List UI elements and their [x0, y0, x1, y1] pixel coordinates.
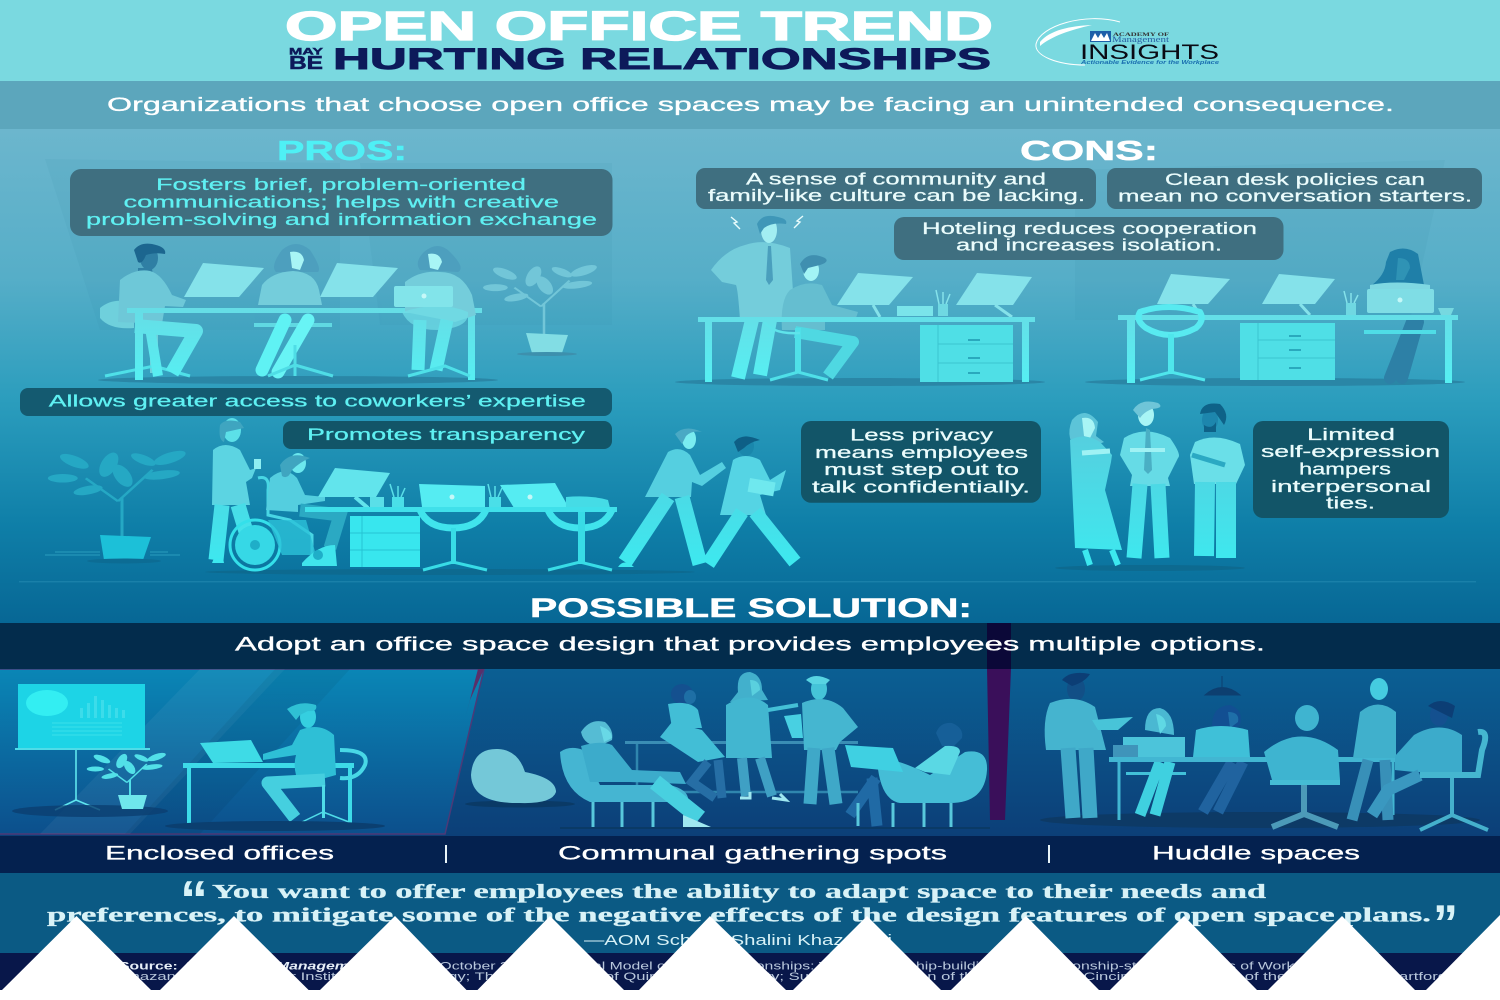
seated man: [762, 255, 858, 380]
beanbag: [465, 749, 575, 808]
callout: cons community: A sense of community and: [746, 170, 1046, 188]
huddle space: [1040, 673, 1488, 830]
scene: pros team at shared desk: [98, 244, 599, 384]
panel: solution illustrations: [0, 668, 1500, 836]
woman sitting on table: [660, 684, 725, 798]
wheelchair user: [230, 453, 340, 570]
logo: Academy of Management Insights: Management: [1112, 35, 1170, 44]
callout: cons limited self-expression: self-expression: [1261, 443, 1440, 461]
callout: cons less privacy: Less privacy: [850, 427, 994, 445]
logo: Academy of Management Insights: [1036, 19, 1219, 66]
logo: Academy of Management Insights: Actionable Evidence for the Workplace: [1080, 60, 1219, 66]
band: solution option labels: [0, 836, 1500, 873]
source footer: [0, 953, 1500, 990]
man on chair, back view: [1264, 705, 1340, 827]
callout: cons hoteling: [894, 217, 1284, 260]
callout: cons community: family-like culture can be lacking.: [708, 187, 1085, 205]
callout: cons less privacy: must step out to: [824, 461, 1019, 479]
heading: pros: PROS:: [277, 135, 407, 166]
band: solution option labels: Enclosed offices: [105, 844, 334, 864]
callout: cons limited self-expression: [1253, 421, 1449, 518]
standing man: [711, 216, 803, 378]
desk with monitor and laptops: [305, 468, 617, 570]
white torn zigzag edge: [0, 915, 1500, 1000]
title: MAY: [289, 46, 323, 56]
title: [285, 3, 993, 76]
heading: cons: CONS:: [1020, 135, 1158, 166]
table: [1109, 757, 1410, 820]
quote block: “: [180, 871, 208, 929]
seated man right: [1372, 701, 1488, 830]
callout: cons limited self-expression: Limited: [1307, 426, 1395, 444]
callout: cons clean desk: mean no conversation starters.: [1118, 188, 1472, 206]
purple column: [987, 668, 1011, 820]
callout: cons hoteling: Hoteling reduces cooperation: [922, 220, 1257, 238]
desk and chair: [1118, 307, 1458, 383]
quote block: —AOM Scholar Shalini Khazanchi: [584, 933, 892, 949]
quote block: You want to offer employees the ability to adapt space to their needs and: [212, 881, 1266, 903]
small plant: [87, 751, 167, 809]
callout: pros fosters brief communications: Fosters brief, problem-oriented: [156, 176, 526, 194]
scene: pros plant, wheelchair user, colleagues: [45, 418, 795, 575]
source footer: Shalini Khazanchi of Rochester Institute of Technology; Theresa Sprinkle of Quinnipiac University; Suzanne Masterson of the University of Cincinnati; Ning Tong of the University of Hartford: [65, 971, 1447, 983]
title: HURTING RELATIONSHIPS: [333, 43, 991, 76]
callout: cons clean desk: Clean desk policies can: [1165, 171, 1425, 189]
man at laptop: [165, 703, 385, 831]
callout: pros transparency: Promotes transparency: [307, 426, 586, 444]
seated woman in armchair: [560, 721, 711, 827]
callout: cons less privacy: [801, 421, 1041, 503]
band: solution option labels: Communal gathering spots: [558, 844, 947, 864]
enclosed office: [0, 669, 484, 834]
desk: [127, 308, 482, 380]
standing man with tablet: [1045, 673, 1133, 818]
standing woman talking: [726, 672, 798, 800]
callout: pros access to expertise: Allows greater access to coworkers’ expertise: [49, 393, 586, 411]
callout: pros fosters brief communications: communications; helps with creative: [124, 194, 559, 212]
large plant: [45, 448, 188, 564]
band: solution option labels: Huddle spaces: [1152, 844, 1360, 864]
logo: Academy of Management Insights: ACADEMY OF: [1113, 33, 1169, 38]
woman at laptop: [1364, 248, 1454, 378]
standing woman with cup: [1352, 678, 1396, 820]
callout: cons clean desk: [1107, 168, 1482, 209]
band: solution statement: [0, 623, 1500, 669]
source footer: Source: Academy of Management Review, October 2018. A Spatial Model of Work Relationships: The Relationship-building and Relationship-straining Effects of Workspace Design: [119, 960, 1390, 972]
scene: cons manager standing over worker: [675, 216, 1045, 386]
woman in armchair with laptop: [560, 723, 990, 829]
logo: Academy of Management Insights: INSIGHTS: [1080, 41, 1219, 64]
walking colleagues: [618, 428, 795, 567]
band: solution statement: Adopt an office space design that provides employees multiple options.: [235, 635, 1265, 656]
heading: possible solution: POSSIBLE SOLUTION:: [530, 593, 972, 623]
seated women: [1113, 705, 1250, 815]
quote block: preferences, to mitigate some of the negative effects of the design features of open space plans.: [47, 905, 1431, 927]
scene: three coworkers with arms crossed: [1055, 402, 1245, 571]
plant: [483, 263, 599, 356]
presentation board: [12, 684, 168, 817]
callout: pros transparency: [283, 421, 612, 449]
title: BE: [289, 52, 323, 73]
callout: pros fosters brief communications: [70, 169, 612, 236]
man seated: [118, 244, 196, 376]
callout: cons limited self-expression: interpersonal: [1271, 478, 1431, 496]
callout: cons less privacy: talk confidentially.: [812, 479, 1030, 497]
quote block: ”: [1433, 895, 1458, 953]
standing woman with cup: [212, 418, 261, 563]
callout: pros access to expertise: [20, 388, 612, 416]
quote block: [0, 871, 1500, 953]
callout: cons community: [696, 168, 1096, 209]
title: OPEN OFFICE TREND: [285, 3, 993, 49]
desk, monitors and drawers: [698, 273, 1035, 382]
man with glasses: [784, 676, 858, 804]
communal gathering area: [465, 672, 990, 829]
subtitle band text: Organizations that choose open office spaces may be facing an unintended consequence.: [107, 95, 1394, 116]
monitors: [184, 263, 398, 297]
woman centre: [254, 244, 333, 376]
woman right with laptop: [394, 246, 476, 376]
callout: cons hoteling: and increases isolation.: [956, 237, 1222, 255]
callout: cons limited self-expression: ties.: [1326, 495, 1375, 513]
callout: cons limited self-expression: hampers: [1299, 461, 1391, 479]
callout: pros fosters brief communications: problem-solving and information exchange: [86, 211, 597, 229]
callout: cons less privacy: means employees: [815, 444, 1028, 462]
chair left: [100, 301, 190, 376]
scene: cons empty desk and isolated worker: [1085, 248, 1465, 386]
